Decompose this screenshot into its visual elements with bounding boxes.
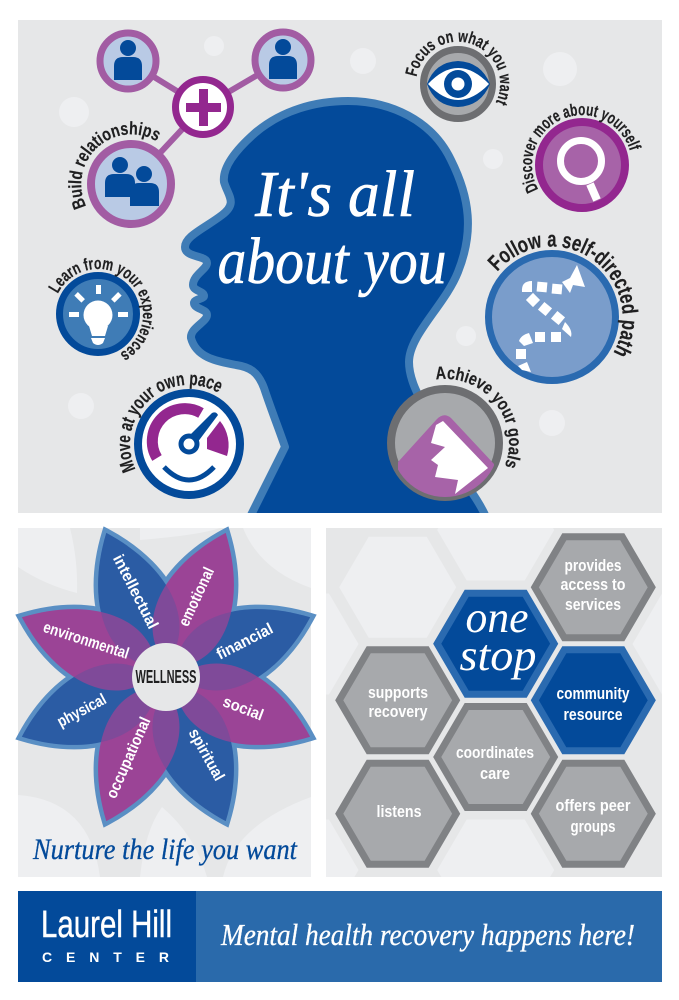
label: follow a self-directed path: Follow a self-directed path <box>487 234 639 356</box>
hexagon: community resource: resource <box>564 705 622 724</box>
hexagon: provides access to services: provides <box>564 556 622 575</box>
hexagon: coordinates care: coordinates <box>456 743 534 762</box>
label: learn from your experiences: Learn from your experiences <box>48 258 154 360</box>
petal labels: environmental <box>41 619 131 663</box>
petal labels: spiritual <box>185 726 227 784</box>
icon: speed gauge <box>138 393 240 495</box>
hexagon: one stop: one <box>466 593 528 642</box>
petal labels: financial <box>214 621 276 663</box>
icon: plus <box>176 80 230 134</box>
icon: eye <box>424 50 492 118</box>
hexagon: provides access to services <box>535 537 652 638</box>
icon: mountain <box>391 389 499 500</box>
title <box>218 158 446 298</box>
hexagon: listens: listens <box>376 802 422 821</box>
title: It's all <box>254 158 415 231</box>
icon: magnifier <box>539 122 625 208</box>
icon: light bulb <box>60 276 136 352</box>
hexagon: supports recovery: recovery <box>368 702 428 721</box>
panel: one stop hexagons <box>326 528 662 877</box>
blue petals <box>8 519 324 835</box>
hexagon: supports recovery: supports <box>368 683 428 702</box>
panel: it's all about you <box>18 20 662 513</box>
logo: Laurel Hill Center <box>41 904 172 965</box>
hexagon: offers peer groups: offers peer <box>556 796 631 815</box>
icon: person right <box>255 32 311 88</box>
hexagon: coordinates care: care <box>480 764 510 783</box>
title: about you <box>218 225 446 298</box>
label: move at your own pace: Move at your own pace <box>120 374 222 474</box>
wellness centre: WELLNESS <box>136 667 196 687</box>
hexagon: one stop: stop <box>460 631 536 680</box>
petal labels: emotional <box>176 565 218 629</box>
purple petals <box>8 519 324 835</box>
hexagon: provides access to services: access to <box>560 575 626 594</box>
petal labels: intellectual <box>109 552 161 632</box>
footer banner <box>18 891 662 982</box>
petal outlines <box>8 519 324 835</box>
icon: person left <box>100 33 156 89</box>
hexagon: one stop <box>437 593 554 694</box>
network connectors <box>153 73 258 154</box>
head silhouette <box>185 101 486 517</box>
icon: two people <box>91 144 171 224</box>
label: focus on what you want: Focus on what you want <box>405 31 510 106</box>
logo: Laurel Hill Center: CENTER <box>42 949 169 965</box>
petal labels <box>41 552 276 801</box>
hexagon: provides access to services: services <box>565 595 621 614</box>
wellness centre <box>132 643 200 711</box>
hexagon: offers peer groups: groups <box>570 817 616 836</box>
label: discover more about yourself: Discover more about yourself <box>522 104 642 194</box>
hexagon: community resource <box>535 650 652 751</box>
label: build relationships: Build relationships <box>68 121 160 210</box>
hexagon: supports recovery <box>339 650 456 751</box>
tagline: Mental health recovery happens here! <box>220 917 635 952</box>
petal overlaps <box>8 519 324 835</box>
panel: wellness flower <box>8 519 324 877</box>
logo: Laurel Hill Center: Laurel Hill <box>41 904 172 946</box>
label: achieve your goals: Achieve your goals <box>436 366 521 468</box>
petal labels: social <box>220 694 266 724</box>
hexagon: listens <box>339 763 456 864</box>
hexagon: community resource: community <box>556 684 630 703</box>
flower caption: Nurture the life you want <box>32 833 298 866</box>
hexagon: offers peer groups <box>535 763 652 864</box>
petal labels: physical <box>55 691 109 731</box>
icon: winding path <box>488 254 616 380</box>
petal labels: occupational <box>104 715 154 801</box>
hexagon: coordinates care <box>437 706 554 808</box>
